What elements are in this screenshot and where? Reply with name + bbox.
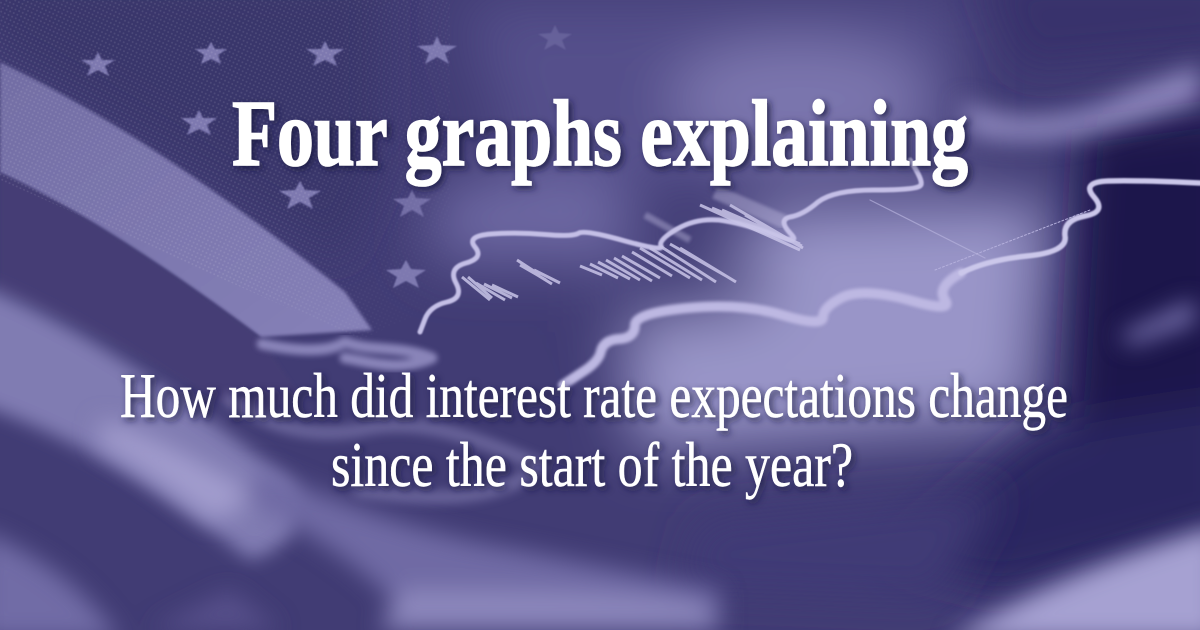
flag dark canton [0, 0, 380, 260]
blurred lower squiggle [230, 400, 540, 497]
mini bar chart [462, 192, 803, 300]
dark lower centre [680, 490, 1000, 600]
background glow [430, 0, 1050, 450]
dark right side [1070, 110, 1200, 430]
blurred foreground squiggle [262, 342, 432, 365]
lower chart line right [961, 181, 1200, 273]
subtitle [120, 360, 1068, 500]
dotted diagonal [935, 210, 1090, 270]
faint diagonal [870, 200, 985, 258]
subtitle: since the start of the year? [331, 429, 853, 500]
fabric texture [0, 0, 450, 340]
flag stars [81, 25, 572, 288]
chart lines [230, 160, 1200, 497]
upper chart line [420, 160, 921, 332]
title: Four graphs explaining [232, 82, 968, 186]
lower chart line left [563, 273, 961, 385]
